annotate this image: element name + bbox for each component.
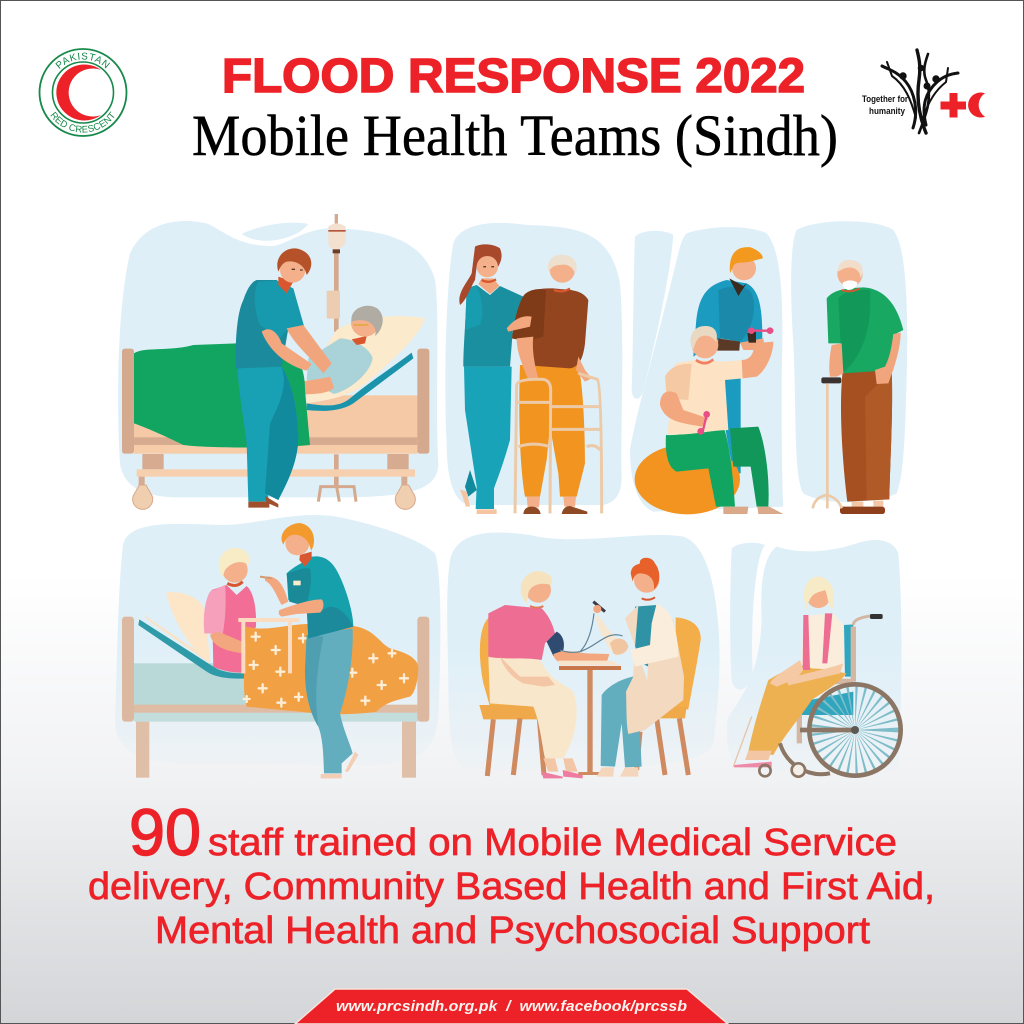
elderly man with cane	[813, 260, 903, 514]
text block: training statement: staff trained on Mobile Medical Service	[208, 822, 897, 864]
logo: Pakistan Red Crescent	[38, 48, 128, 137]
female nurse	[459, 244, 523, 514]
text block: training statement: Mental Health and Psychosocial Support	[155, 910, 870, 952]
panel background blobs	[445, 221, 907, 512]
panel: nurse feeding bed patient	[115, 515, 440, 778]
logo: Pakistan Red Crescent: PAKISTAN	[55, 52, 110, 69]
footer ribbon with web addresses: www.prcsindh.org.pk / www.facebook/prcssb	[336, 998, 687, 1015]
exercise ball	[635, 444, 740, 514]
icon: red cross	[940, 93, 966, 118]
subtitle: Mobile Health Teams (Sindh)	[192, 103, 838, 168]
icon: red crescent	[968, 92, 985, 117]
table	[558, 661, 622, 775]
doctor's chair	[637, 617, 701, 775]
nurse in teal scrubs	[236, 248, 332, 508]
over-bed table	[238, 620, 299, 673]
text block: training statement: 90	[129, 795, 201, 869]
walker frame	[515, 373, 602, 513]
woman in wheelchair	[733, 577, 901, 777]
panel: walking, exercise and cane	[445, 221, 907, 514]
panel: blood pressure and wheelchair	[447, 533, 901, 778]
panel background blob	[115, 515, 440, 765]
nurse with spoon	[260, 523, 358, 778]
patient lying in bed	[287, 306, 383, 394]
title: FLOOD RESPONSE 2022	[222, 50, 805, 103]
elderly man with walker	[507, 255, 592, 514]
logo: Together for humanity	[862, 50, 985, 133]
iv stand	[318, 214, 356, 502]
logo: Pakistan Red Crescent: RED CRESCENT	[50, 111, 114, 133]
panel: nurse with bed patient	[118, 214, 438, 509]
logo: Together for humanity: humanity	[869, 106, 906, 117]
woman's chair	[479, 617, 544, 776]
panel background blob	[118, 221, 438, 497]
seated woman patient	[488, 571, 609, 778]
hospital bed	[122, 316, 429, 509]
green blanket	[134, 343, 310, 447]
icon: tree of raised figures	[882, 50, 958, 133]
patient exercising with dumbbells	[660, 326, 783, 514]
footer ribbon with web addresses	[295, 989, 728, 1024]
text block: training statement: delivery, Community Based Health and First Aid,	[88, 866, 935, 908]
logo: Together for humanity: Together for	[862, 94, 908, 105]
patient sitting in bed	[204, 548, 266, 673]
orange patterned blanket	[244, 624, 418, 714]
text block: training statement	[88, 795, 935, 952]
nurse behind exercising patient	[693, 247, 765, 473]
doctor with blood pressure monitor	[560, 558, 684, 777]
panel background blobs	[447, 533, 720, 770]
blanket flower pattern	[244, 633, 408, 707]
bed with mattress	[122, 592, 429, 778]
